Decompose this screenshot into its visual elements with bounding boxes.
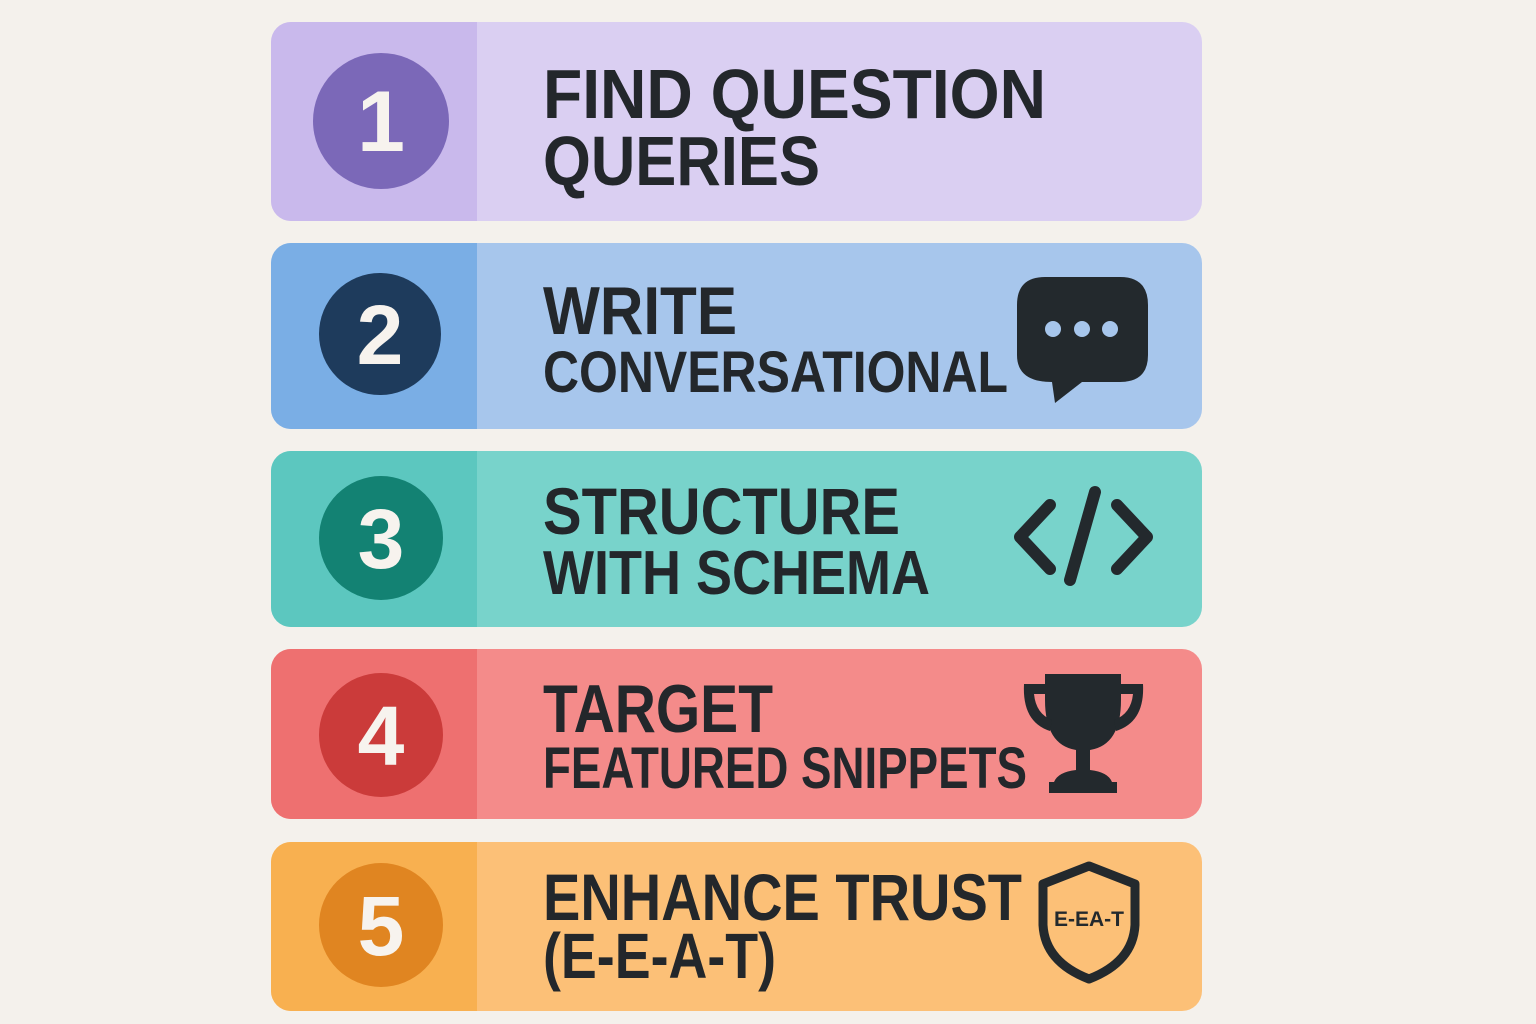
- heading 1: [543, 55, 1046, 200]
- heading 2: WRITE: [543, 273, 737, 349]
- icon: code brackets: [1020, 492, 1147, 580]
- number badge 2: 2: [357, 288, 403, 382]
- heading 2: [543, 273, 1008, 405]
- number badge 2: [319, 273, 441, 395]
- icon: chat bubble: [1017, 277, 1148, 403]
- heading 3: [543, 474, 930, 608]
- heading 3: WITH SCHEMA: [543, 539, 930, 608]
- heading 1: FIND QUESTION: [543, 55, 1046, 133]
- heading 3: STRUCTURE: [543, 474, 900, 548]
- heading 5: ENHANCE TRUST: [543, 860, 1022, 934]
- panel: step 5 enhance trust: [271, 842, 1202, 1011]
- heading 4: [543, 671, 1027, 801]
- heading 4: TARGET: [543, 671, 773, 747]
- number badge 1: [313, 53, 449, 189]
- heading 1: QUERIES: [543, 122, 820, 200]
- number badge 3: [319, 476, 443, 600]
- number badge 3: 3: [358, 492, 404, 586]
- number badge 5: 5: [358, 879, 404, 973]
- number badge 5: [319, 863, 443, 987]
- icon: E-EA-T shield: E-EA-T: [1054, 908, 1124, 931]
- panel: step 4 target featured snippets: [271, 649, 1202, 819]
- heading 2: CONVERSATIONAL: [543, 340, 1008, 405]
- icon: E-EA-T shield: [1043, 866, 1135, 979]
- panel: step 1 find question queries: [271, 22, 1202, 221]
- heading 5: (E-E-A-T): [543, 920, 776, 992]
- number badge 1: 1: [357, 74, 405, 170]
- panel: step 2 write conversational: [271, 243, 1202, 429]
- number badge 4: 4: [358, 689, 405, 783]
- panel: step 3 structure with schema: [271, 451, 1202, 627]
- heading 5: [543, 860, 1022, 992]
- heading 4: FEATURED SNIPPETS: [543, 736, 1027, 801]
- number badge 4: [319, 673, 443, 797]
- icon: trophy: [1024, 674, 1143, 793]
